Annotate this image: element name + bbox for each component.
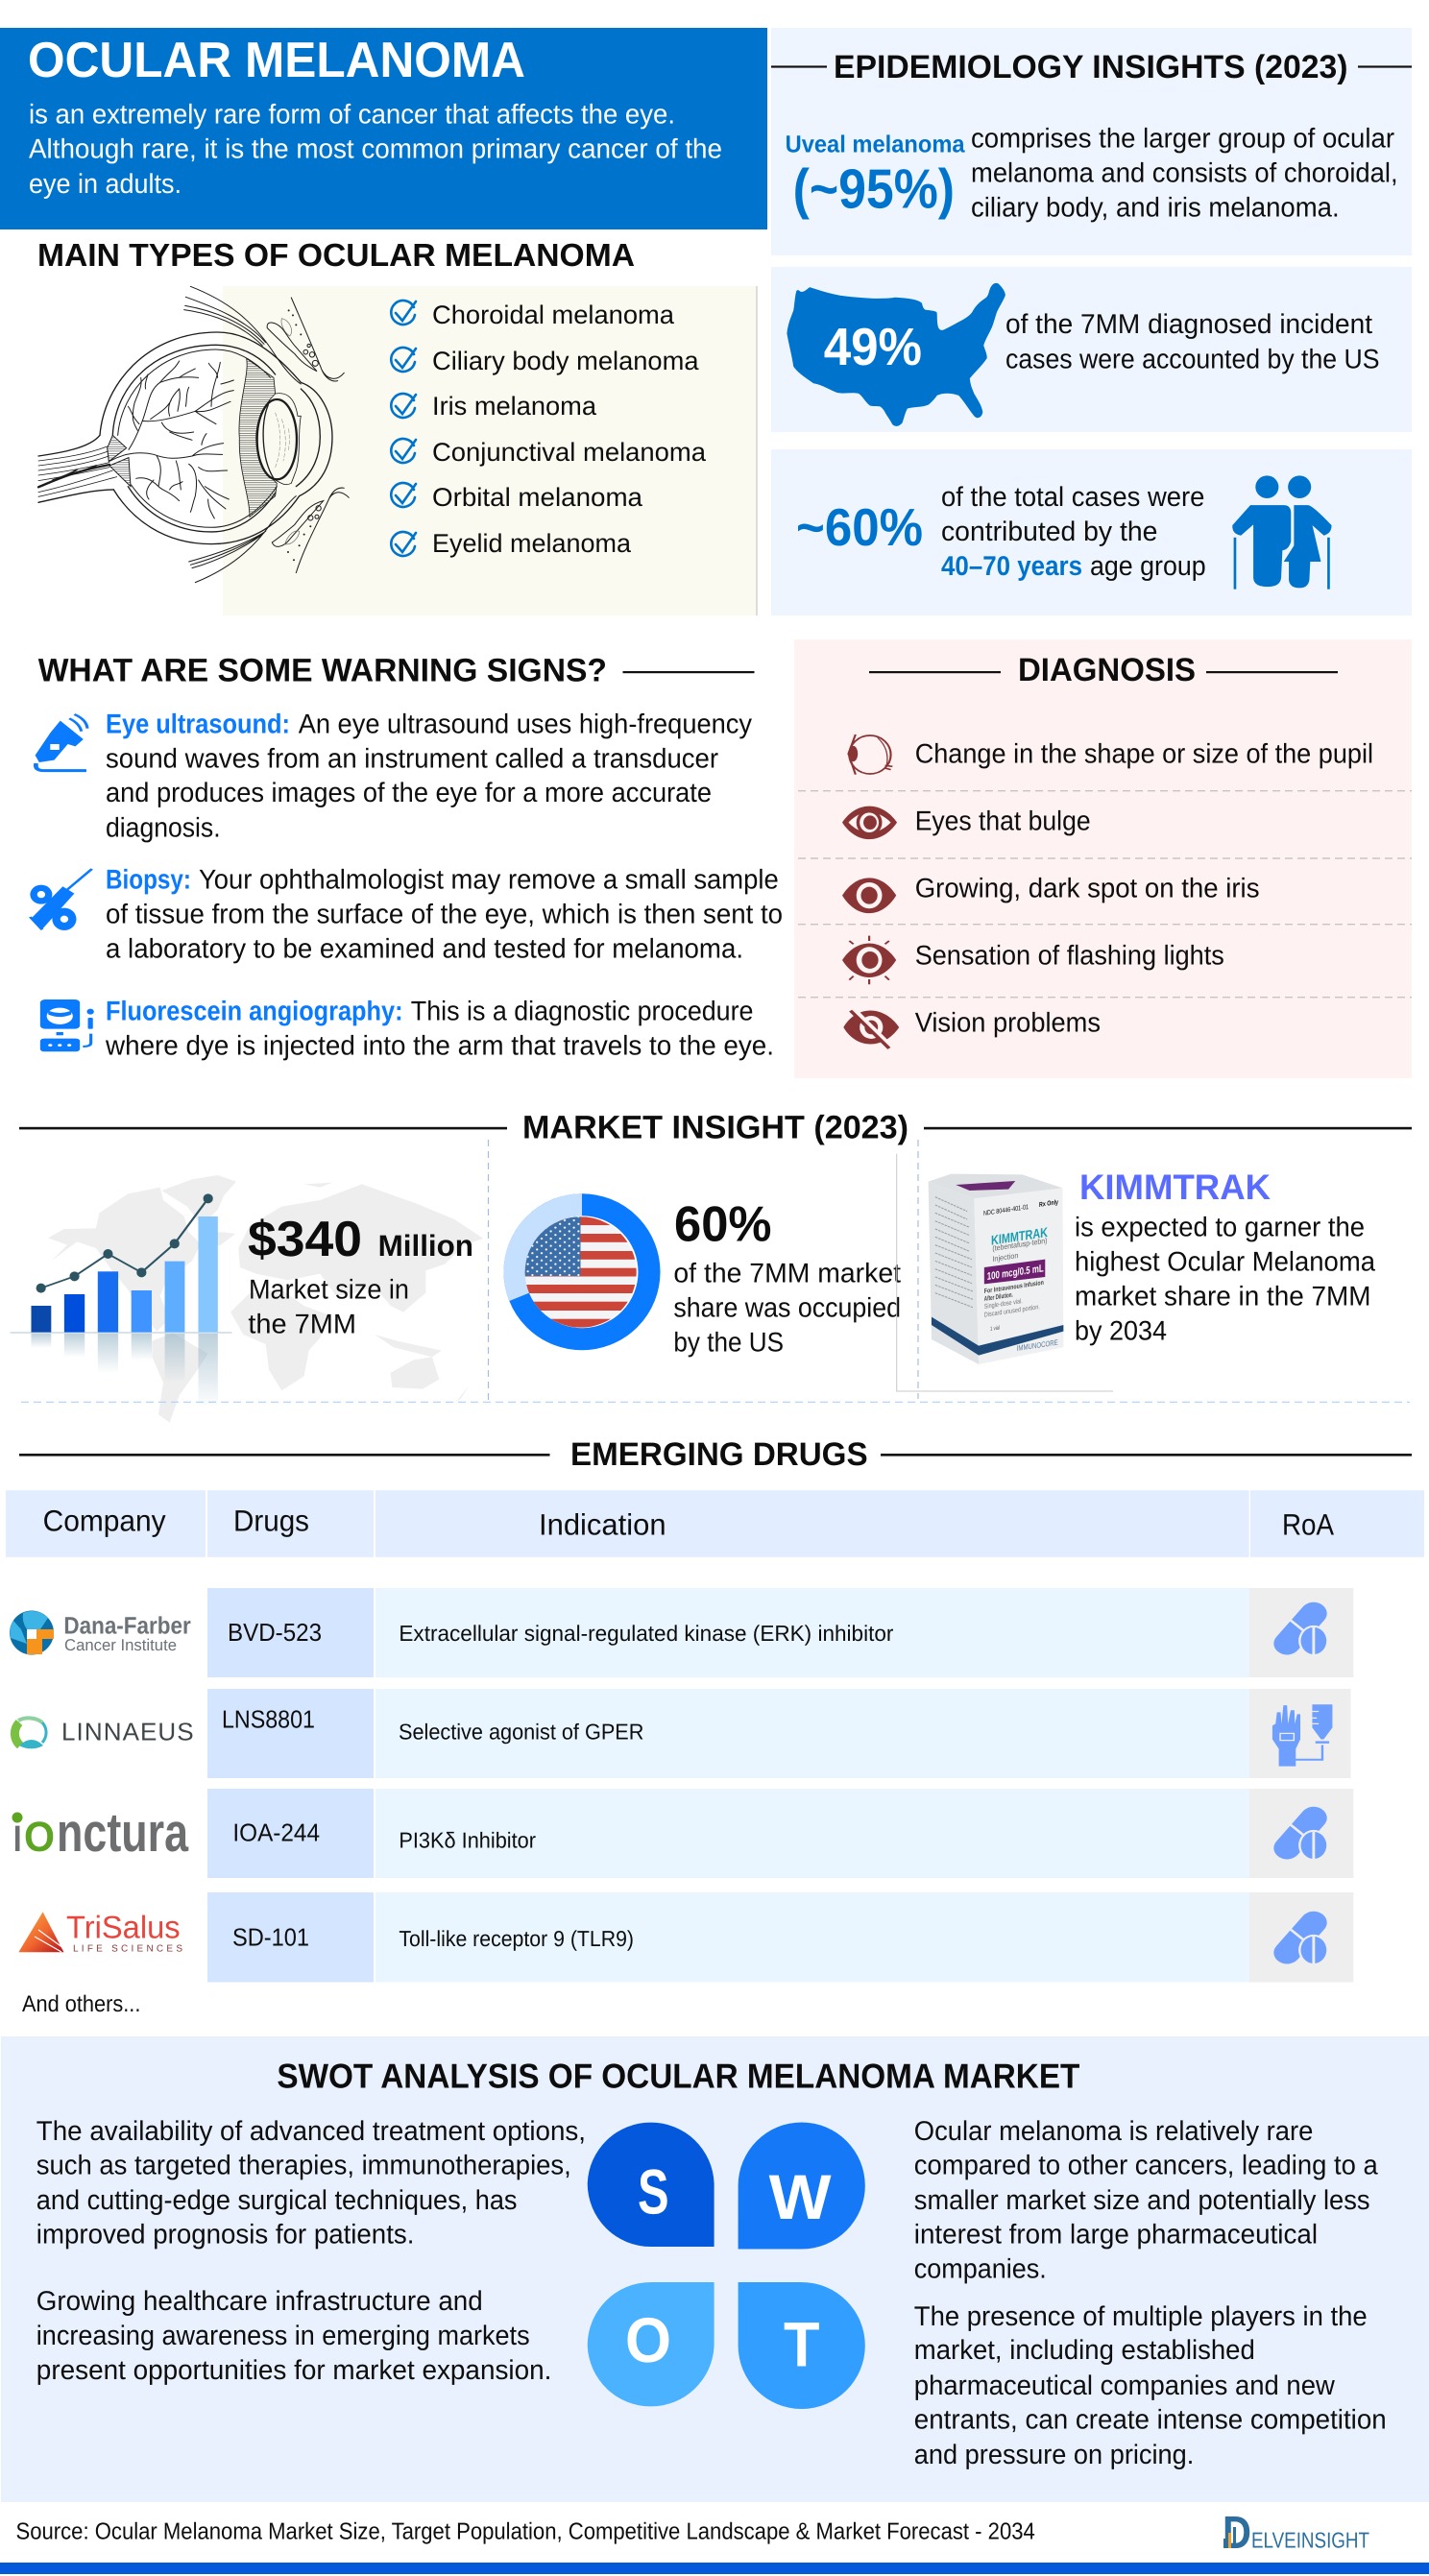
KIMMTRAK product box (897, 1154, 1113, 1391)
US share text: of the 7MM diagnosed incident (1005, 309, 1372, 340)
uveal melanoma description: melanoma and consists of choroidal, (971, 157, 1398, 188)
section: emerging drugs (6, 1436, 1424, 2017)
age group text: age group (1090, 551, 1206, 582)
table row: LNS8801: LNS8801 (222, 1704, 315, 1733)
heading: emerging drugs: EMERGING DRUGS (570, 1436, 868, 1473)
KIMMTRAK product box: 1 vial (990, 1325, 1000, 1333)
logo: iOnctura: i (13, 1808, 22, 1862)
eye ultrasound text (106, 709, 753, 843)
bars (31, 1216, 218, 1333)
US share text: cases were accounted by the US (1005, 344, 1379, 374)
panel: epidemiology uveal melanoma (771, 28, 1412, 255)
KIMMTRAK text: is expected to garner the (1075, 1212, 1365, 1242)
SWOT tile O (588, 2282, 714, 2406)
age group text: contributed by the (941, 517, 1157, 547)
panel: SWOT analysis (1, 2036, 1429, 2502)
text: vision problems: Vision problems (915, 1007, 1101, 1038)
table row: BVD-523: Extracellular signal-regulated kinase (ERK) inhibitor (399, 1621, 894, 1646)
table row: LNS8801: Selective agonist of GPER (399, 1719, 643, 1744)
checklist of melanoma types: Ciliary body melanoma (432, 347, 699, 375)
uveal melanoma description (971, 124, 1398, 224)
intro text (29, 99, 722, 200)
intro text: eye in adults. (29, 169, 182, 200)
table row: BVD-523 (10, 1588, 1353, 1677)
icon: ultrasound probe (36, 714, 87, 771)
threats text: and pressure on pricing. (914, 2440, 1194, 2470)
logo: TriSalus: TriSalus (66, 1909, 181, 1944)
icon: vision problems eye (843, 1010, 899, 1048)
weaknesses text: interest from large pharmaceutical (914, 2220, 1318, 2251)
icon: elderly couple (1232, 475, 1332, 590)
header banner (0, 28, 767, 229)
world map background (48, 1175, 483, 1423)
SWOT tile O: O (625, 2304, 671, 2375)
strengths text: such as targeted therapies, immunotherapies, (36, 2151, 571, 2181)
opportunities text (36, 2286, 551, 2386)
table header: Drugs (233, 1504, 309, 1538)
stat: US market share: by the US (673, 1328, 784, 1359)
title: OCULAR MELANOMA (28, 33, 525, 88)
logo: iOnctura: O (24, 1814, 55, 1861)
eye ultrasound text: Eye ultrasound: (106, 709, 290, 739)
icon: oral pill (1287, 1613, 1329, 1656)
eye ultrasound text: An eye ultrasound uses high-frequency (299, 709, 753, 739)
stat: US market share: of the 7MM market (673, 1259, 901, 1289)
panel: warning signs (30, 652, 783, 1061)
stat: market size (248, 1212, 473, 1339)
logo: Dana-Farber: Dana-Farber (63, 1613, 191, 1640)
heading: SWOT analysis: SWOT ANALYSIS OF OCULAR MELANOMA MARKET (277, 2057, 1079, 2096)
biopsy text (106, 865, 783, 965)
logo: iOnctura (12, 1802, 189, 1864)
and others note: And others... (22, 1991, 140, 2017)
KIMMTRAK text: by 2034 (1075, 1315, 1167, 1346)
panel: epidemiology age group (771, 449, 1412, 615)
checklist of melanoma types: Conjunctival melanoma (432, 438, 707, 467)
stat: market size: $340 (248, 1212, 362, 1267)
uveal melanoma description: comprises the larger group of ocular (971, 124, 1394, 155)
stat: uveal melanoma 95%: Uveal melanoma (786, 132, 966, 158)
checklist of melanoma types: Orbital melanoma (432, 483, 643, 512)
icon: US flag (524, 1216, 637, 1328)
icon: oral pill (1287, 1818, 1329, 1861)
KIMMTRAK text: KIMMTRAK (1079, 1168, 1271, 1207)
weaknesses text: compared to other cancers, leading to a (914, 2151, 1378, 2181)
fluorescein angiography text: where dye is injected into the arm that travels to the eye. (105, 1030, 774, 1061)
table header (6, 1490, 1424, 1557)
KIMMTRAK product box: IMMUNOCORE (1017, 1338, 1058, 1353)
KIMMTRAK product box: NDC 80446-401-01 (983, 1204, 1029, 1217)
heading: main types: MAIN TYPES OF OCULAR MELANOMA (37, 238, 635, 274)
weaknesses text: companies. (914, 2253, 1047, 2284)
eye ultrasound text: diagnosis. (106, 812, 221, 843)
opportunities text: increasing awareness in emerging markets (36, 2321, 530, 2351)
table header: RoA (1282, 1507, 1334, 1542)
KIMMTRAK product box: Single-dose vial. (984, 1297, 1023, 1311)
checklist of melanoma types (391, 301, 707, 558)
heading: epidemiology insights: EPIDEMIOLOGY INSIGHTS (2023) (834, 49, 1348, 85)
icon: pupil change (848, 734, 892, 775)
opportunities text: present opportunities for market expansion. (36, 2355, 551, 2386)
table row: BVD-523: BVD-523 (228, 1618, 322, 1647)
logo: Linnaeus: LINNAEUS (61, 1718, 194, 1746)
stat: ~60%: ~60% (796, 497, 923, 557)
intro text: Although rare, it is the most common primary cancer of the (29, 134, 722, 165)
fluorescein angiography text (105, 996, 774, 1061)
fluorescein angiography text: Fluorescein angiography: (106, 996, 403, 1026)
strengths text: improved prognosis for patients. (36, 2220, 414, 2251)
opportunities text: Growing healthcare infrastructure and (36, 2286, 483, 2317)
trend line (36, 1193, 213, 1293)
US share text (1005, 309, 1379, 374)
eye ultrasound text: and produces images of the eye for a more accurate (106, 778, 712, 808)
source line: Source: Ocular Melanoma Market Size, Target Population, Competitive Landscape & Market Forecast - 2034 (15, 2519, 1035, 2545)
logo: DelveInsight: D (1223, 2508, 1251, 2559)
icon: flashing lights eye (842, 936, 896, 984)
SWOT tile W: W (769, 2161, 832, 2232)
icon: dark spot eye (842, 878, 896, 913)
KIMMTRAK product box: KIMMTRAK (991, 1224, 1048, 1248)
intro text: is an extremely rare form of cancer that affects the eye. (29, 99, 675, 130)
SWOT tile T (739, 2282, 865, 2409)
table header: Company (43, 1504, 166, 1538)
uveal melanoma description: ciliary body, and iris melanoma. (971, 193, 1340, 224)
text: bulging eye: Eyes that bulge (915, 806, 1091, 836)
KIMMTRAK text (1075, 1168, 1375, 1346)
biopsy text: of tissue from the surface of the eye, which is then sent to (106, 900, 783, 930)
threats text: entrants, can create intense competition (914, 2405, 1387, 2436)
strengths text (36, 2116, 586, 2251)
logo: TriSalus (18, 1909, 182, 1954)
text: flashing lights: Sensation of flashing lights (915, 940, 1224, 971)
heading: diagnosis: DIAGNOSIS (1018, 652, 1196, 688)
SWOT tile S (588, 2123, 714, 2247)
bar chart: market growth (11, 1193, 231, 1408)
biopsy text: Biopsy: (106, 865, 191, 896)
age group text (941, 482, 1206, 582)
strengths text: and cutting-edge surgical techniques, has (36, 2185, 518, 2216)
icon: angiography device (40, 999, 94, 1051)
check icons (391, 301, 416, 556)
icon: IV infusion (1272, 1704, 1332, 1767)
SWOT tile S: S (638, 2156, 669, 2227)
checklist of melanoma types: Iris melanoma (432, 392, 597, 421)
stat: US market share: 60% (674, 1197, 772, 1253)
logo: Dana-Farber: Cancer Institute (64, 1636, 177, 1654)
stat: US market share (673, 1197, 901, 1359)
KIMMTRAK text: highest Ocular Melanoma (1075, 1246, 1375, 1277)
logo: iOnctura: nctura (57, 1802, 189, 1864)
threats text: The presence of multiple players in the (914, 2301, 1368, 2332)
SWOT tile T: T (784, 2308, 820, 2379)
heading: warning signs: WHAT ARE SOME WARNING SIGNS? (38, 652, 607, 688)
KIMMTRAK product box: 100 mcg/0.5 mL (987, 1263, 1044, 1283)
icon: biopsy tool (30, 869, 92, 930)
KIMMTRAK product box: Rx Only (1039, 1198, 1058, 1209)
table row: SD-101 (18, 1892, 1353, 1982)
icon: oral pill (1287, 1922, 1329, 1965)
icon: US map with 49%: 49% (824, 317, 922, 376)
logo: DelveInsight: ELVEINSIGHT (1251, 2527, 1369, 2552)
KIMMTRAK product box: For Intravenous Infusion (984, 1279, 1044, 1295)
table row: SD-101: Toll-like receptor 9 (TLR9) (399, 1926, 634, 1951)
weaknesses text (914, 2116, 1378, 2284)
age group text: of the total cases were (941, 482, 1204, 513)
table row: SD-101: SD-101 (232, 1922, 309, 1951)
logo: DelveInsight (1223, 2508, 1369, 2559)
weaknesses text: smaller market size and potentially less (914, 2185, 1369, 2216)
checklist of melanoma types: Eyelid melanoma (432, 529, 632, 558)
text: pupil change: Change in the shape or size of the pupil (915, 738, 1373, 769)
stat: US market share: share was occupied (673, 1293, 901, 1324)
table row: IOA-244: PI3Kδ Inhibitor (399, 1827, 536, 1852)
threats text (914, 2301, 1387, 2470)
KIMMTRAK product box: Discard unused portion. (984, 1303, 1040, 1319)
logo: Dana-Farber (10, 1611, 191, 1655)
threats text: pharmaceutical companies and new (914, 2371, 1335, 2401)
table row: IOA-244 (12, 1789, 1353, 1878)
text: dark spot: Growing, dark spot on the iris (915, 873, 1260, 903)
icon: eye anatomy illustration (38, 286, 349, 583)
SWOT tile W (739, 2122, 865, 2249)
stat: market size: Million (378, 1229, 473, 1263)
bottom bar (0, 2563, 1429, 2574)
logo: TriSalus: LIFE SCIENCES (73, 1943, 182, 1954)
section: market insight (11, 1110, 1412, 1423)
biopsy text: a laboratory to be examined and tested for melanoma. (106, 934, 743, 965)
biopsy text: Your ophthalmologist may remove a small sample (199, 865, 779, 896)
KIMMTRAK product box: After Dilution. (984, 1291, 1013, 1303)
panel: diagnosis (794, 639, 1412, 1078)
stat: market size: the 7MM (248, 1309, 356, 1339)
stat: market size: Market size in (249, 1274, 409, 1305)
fluorescein angiography text: This is a diagnostic procedure (411, 996, 753, 1026)
table row: IOA-244: IOA-244 (232, 1818, 320, 1847)
heading: market insight: MARKET INSIGHT (2023) (522, 1110, 908, 1146)
stat: uveal melanoma 95% (786, 132, 966, 221)
strengths text: The availability of advanced treatment options, (36, 2116, 586, 2147)
table header: Indication (539, 1507, 666, 1542)
panel: epidemiology US share (771, 267, 1412, 432)
eye ultrasound text: sound waves from an instrument called a transducer (106, 743, 718, 774)
KIMMTRAK product box: (tebentafusp-tebn) (992, 1237, 1048, 1253)
checklist of melanoma types: Choroidal melanoma (432, 301, 675, 329)
stat: uveal melanoma 95%: (~95%) (793, 158, 955, 221)
weaknesses text: Ocular melanoma is relatively rare (914, 2116, 1313, 2147)
donut chart with US flag (515, 1205, 649, 1339)
age group text: 40–70 years (941, 551, 1082, 582)
icon: US map with 49% (788, 285, 1004, 424)
logo: Linnaeus (14, 1718, 194, 1748)
table row: LNS8801 (14, 1689, 1351, 1778)
KIMMTRAK text: market share in the 7MM (1075, 1281, 1371, 1312)
icon: bulging eye (842, 807, 897, 839)
cream list panel (223, 286, 757, 615)
threats text: market, including established (914, 2335, 1255, 2366)
KIMMTRAK product box: Injection (992, 1251, 1018, 1264)
panel: main types of ocular melanoma (37, 238, 757, 615)
